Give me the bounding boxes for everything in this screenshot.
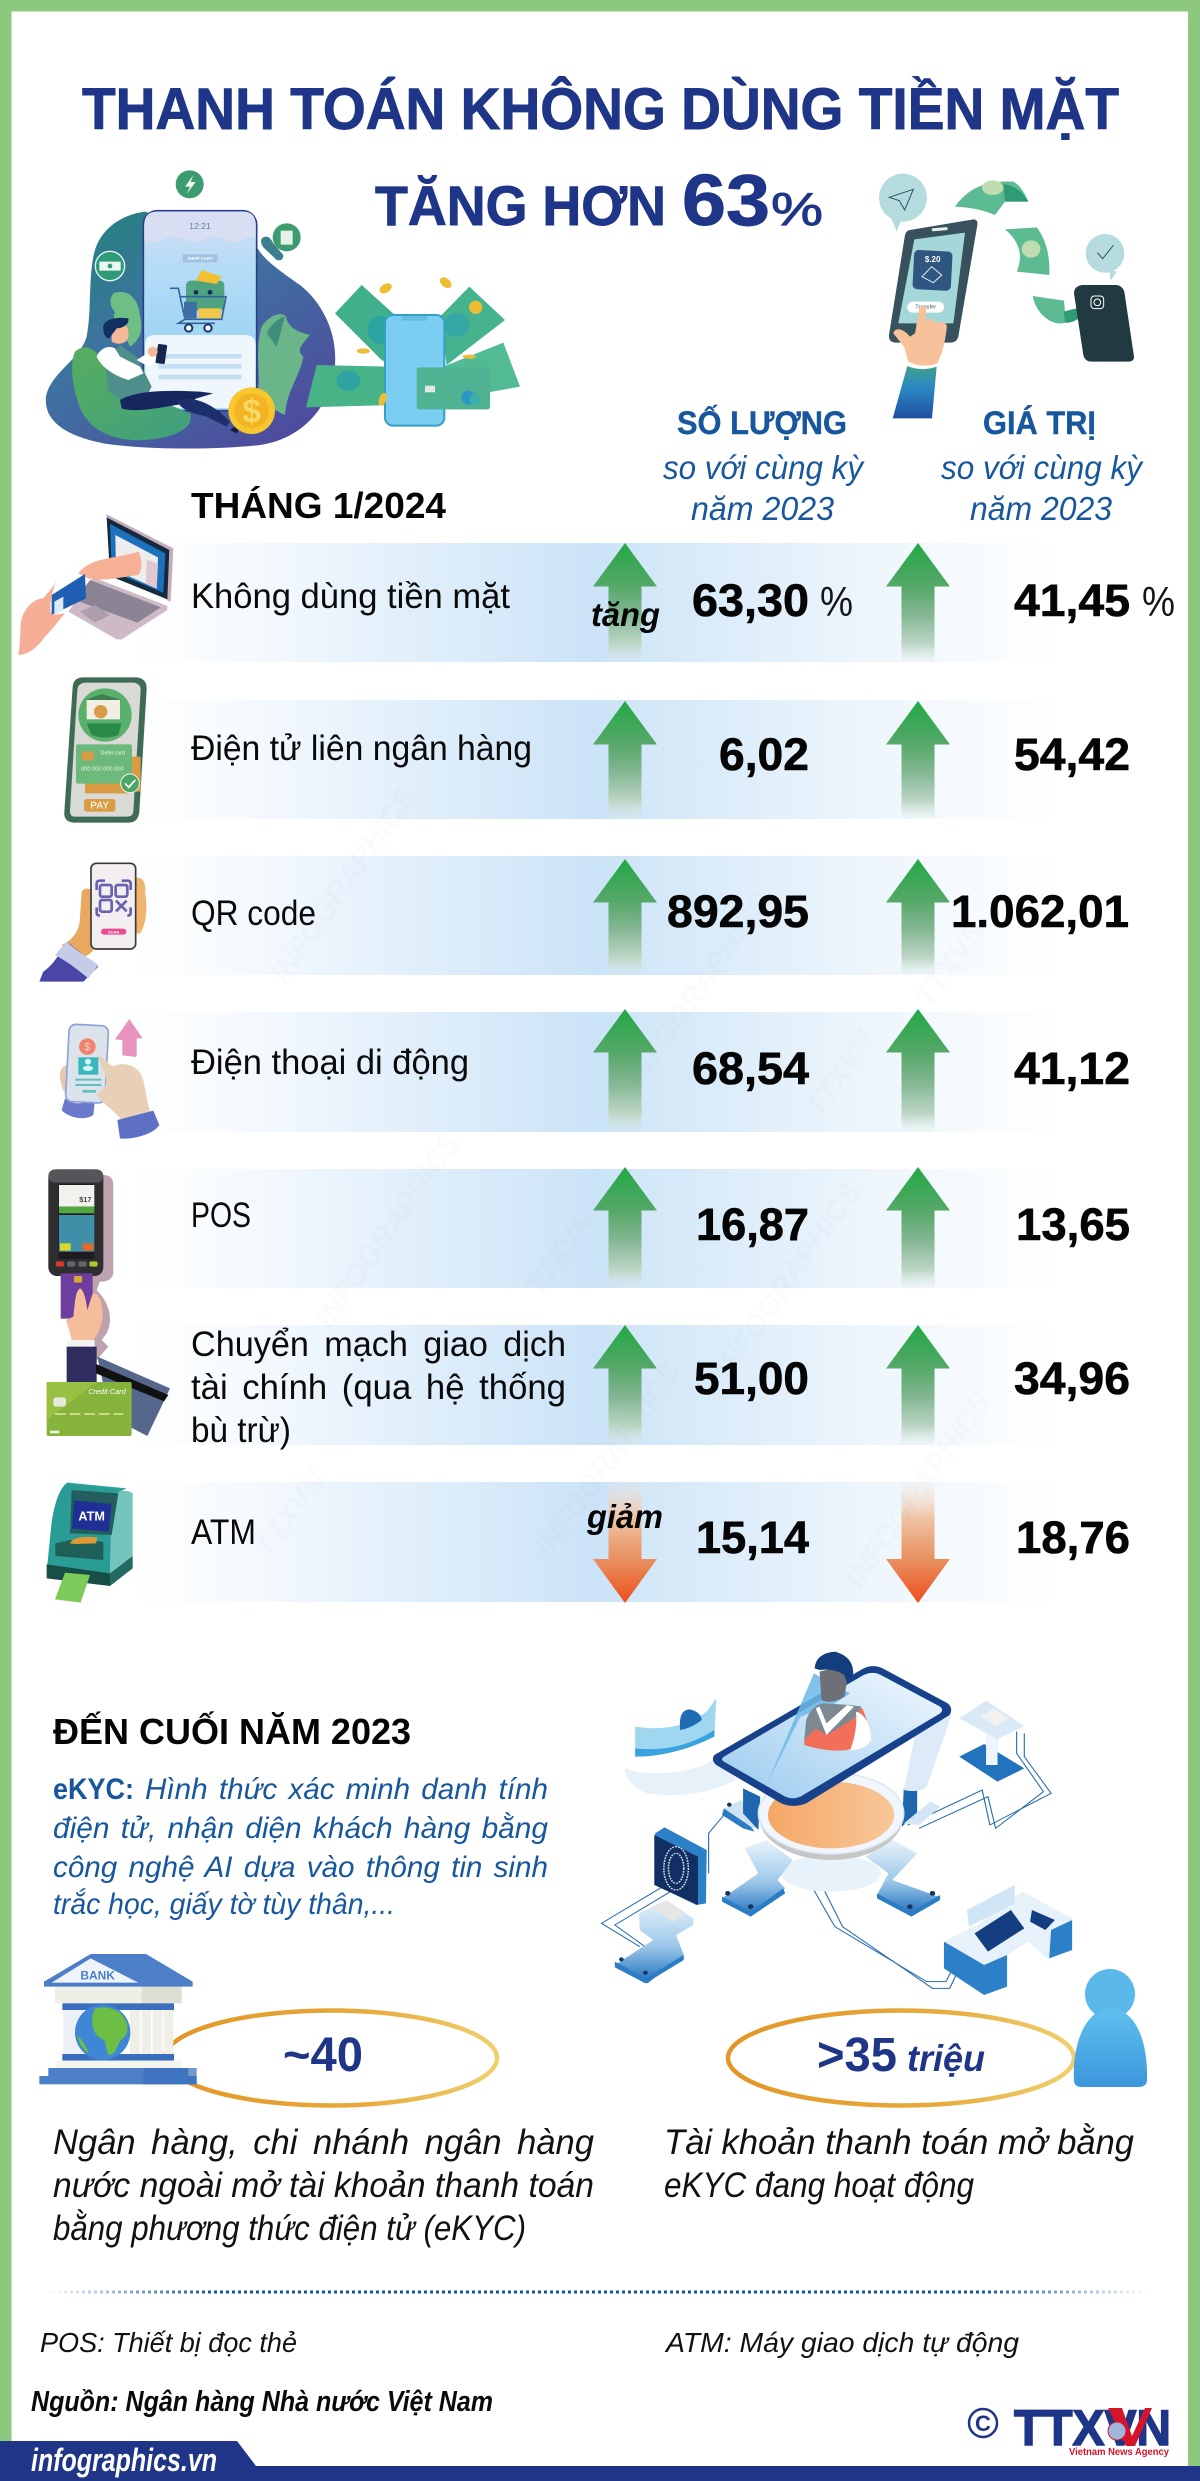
text: TTXVN bbox=[519, 1203, 603, 1304]
row: điện tử liên ngân hàng: Điện tử liên ngân hàng bbox=[191, 729, 532, 768]
icon: phone banking bbox=[64, 677, 147, 823]
row: điện thoại di động: Điện thoại di động bbox=[191, 1043, 469, 1082]
phone with shopping cart: SHOP CART bbox=[187, 256, 213, 261]
ellipse: 40 callout: ~40 bbox=[283, 2029, 363, 2082]
ekyc definition: công nghệ AI dựa vào thông tin sinh bbox=[53, 1851, 548, 1884]
speech bubble with paper plane bbox=[879, 174, 927, 232]
glow behind arc bbox=[624, 1753, 735, 1795]
section heading: đến cuối năm 2023: ĐẾN CUỐI NĂM 2023 bbox=[53, 1710, 411, 1752]
round app icons bbox=[95, 170, 301, 281]
row: qr code: 1.062,01 bbox=[951, 886, 1129, 937]
title: 63 bbox=[682, 161, 770, 241]
row: điện thoại di động: 68,54 bbox=[692, 1043, 809, 1094]
text: TTXVN bbox=[799, 1023, 883, 1124]
text: TTXVN bbox=[909, 913, 993, 1014]
description: accounts: eKYC đang hoạt động bbox=[664, 2166, 974, 2205]
description: banks: bằng phương thức điện tử (eKYC) bbox=[53, 2209, 526, 2248]
description: accounts: Tài khoản thanh toán mở bằng bbox=[664, 2123, 1135, 2162]
row: không dùng tiền mặt bbox=[130, 543, 1175, 662]
icon: bank with globe bbox=[39, 1954, 197, 2084]
row: điện tử liên ngân hàng: 6,02 bbox=[719, 729, 809, 780]
platform bbox=[722, 1773, 940, 1917]
bank notes in flight bbox=[955, 180, 1091, 324]
row: chuyển mạch: Chuyển mạch giao dịch bbox=[191, 1325, 566, 1364]
note: atm: ATM: Máy giao dịch tự động bbox=[664, 2327, 1019, 2358]
hand and sleeve bbox=[893, 306, 947, 418]
person on beanbag bbox=[72, 318, 245, 440]
row: chuyển mạch: bù trừ) bbox=[191, 1411, 291, 1450]
row: không dùng tiền mặt: 41,45 bbox=[1014, 575, 1130, 626]
circuit lines bbox=[601, 1732, 1051, 1988]
sending phone: Transfer bbox=[915, 305, 936, 311]
icon: hand tapping phone bbox=[60, 1019, 159, 1139]
row: không dùng tiền mặt: 63,30 bbox=[692, 575, 809, 626]
row: qr code bbox=[130, 856, 1129, 975]
icon: laptop and card bbox=[18, 514, 173, 655]
ekyc definition: eKYC: bbox=[53, 1773, 134, 1806]
row: điện thoại di động bbox=[130, 1009, 1130, 1132]
blob background bbox=[46, 212, 335, 449]
ekyc definition: điện tử, nhận diện khách hàng bằng bbox=[53, 1812, 548, 1845]
row: pos bbox=[130, 1167, 1130, 1288]
ellipse: 35 triệu callout: >35 bbox=[817, 2029, 897, 2082]
row: pos: 16,87 bbox=[696, 1199, 809, 1250]
source: Nguồn: Ngân hàng Nhà nước Việt Nam bbox=[31, 2386, 493, 2418]
column heading: giá trị: GIÁ TRỊ bbox=[983, 405, 1096, 441]
logo: ttxvn: Vietnam News Agency bbox=[1069, 2447, 1169, 2458]
title: % bbox=[771, 183, 823, 235]
phone with shopping cart bbox=[143, 211, 257, 411]
icon: pos terminal with hand: $17 bbox=[79, 1195, 91, 1204]
icon: atm machine: ATM bbox=[78, 1510, 105, 1524]
text: INFOGRAPHICS bbox=[709, 1177, 868, 1384]
icon: phone banking: Debit card bbox=[101, 750, 125, 756]
logo: ttxvn: C bbox=[975, 2411, 991, 2436]
ekyc definition: Hình thức xác minh danh tính bbox=[145, 1773, 548, 1806]
column heading: số lượng: SỐ LƯỢNG bbox=[677, 405, 847, 441]
icon: credit cards bbox=[47, 1357, 170, 1436]
title: THANH TOÁN KHÔNG DÙNG TIỀN MẶT bbox=[82, 77, 1119, 142]
icon: bank with globe: BANK bbox=[80, 1968, 115, 1982]
text: TTXVN bbox=[249, 1463, 333, 1564]
receiving phone and bubble bbox=[1074, 234, 1134, 362]
illustration: phone money transfer bbox=[879, 174, 1134, 418]
icon: phone banking: PAY bbox=[90, 801, 109, 812]
ellipse: 35 triệu callout: triệu bbox=[907, 2038, 985, 2079]
text: INFOGRAPHICS bbox=[264, 782, 423, 989]
column heading: số lượng: so với cùng kỳ bbox=[663, 449, 865, 486]
row: chuyển mạch bbox=[130, 1325, 1130, 1450]
section heading: tháng 1/2024: THÁNG 1/2024 bbox=[191, 485, 446, 526]
row: chuyển mạch: 51,00 bbox=[694, 1353, 809, 1404]
illustration: person shopping on phone with money bbox=[46, 170, 520, 449]
icon: credit cards: Credit Card bbox=[88, 1387, 127, 1396]
row: atm: 18,76 bbox=[1016, 1512, 1130, 1563]
logo: ttxvn: TTXVN bbox=[1014, 2400, 1171, 2456]
ellipse: 40 callout bbox=[165, 2010, 497, 2106]
row: atm: 15,14 bbox=[696, 1512, 809, 1563]
row: không dùng tiền mặt: % bbox=[1142, 578, 1175, 625]
row: qr code: QR code bbox=[191, 894, 316, 933]
row: không dùng tiền mặt: tăng bbox=[591, 596, 660, 633]
icon: atm machine bbox=[47, 1483, 133, 1603]
scanner bottom left bbox=[615, 1900, 693, 1983]
icon: person bbox=[1074, 1969, 1147, 2087]
icon: hand with qr phone: SCAN bbox=[108, 929, 119, 934]
row: atm: giảm bbox=[586, 1498, 663, 1535]
row: pos: 13,65 bbox=[1016, 1199, 1130, 1250]
row: qr code: 892,95 bbox=[667, 886, 809, 937]
illustration: ekyc platform bbox=[601, 1652, 1072, 1995]
note: pos: POS: Thiết bị đọc thẻ bbox=[40, 2327, 297, 2358]
title bbox=[82, 77, 1119, 241]
column heading: số lượng: năm 2023 bbox=[691, 490, 835, 527]
sending phone bbox=[889, 219, 977, 343]
text: INFOGRAPHICS bbox=[529, 1357, 688, 1564]
text: INFOGRAPHICS bbox=[839, 1387, 998, 1594]
icon: hand tapping phone: $ bbox=[84, 1042, 90, 1054]
text: INFOGRAPHICS bbox=[619, 887, 778, 1094]
column heading: số lượng bbox=[663, 405, 865, 527]
reception desk bbox=[944, 1885, 1072, 1995]
phone with shopping cart: 12:21 bbox=[189, 221, 211, 231]
fingerprint panel bbox=[654, 1827, 707, 1905]
tablet with face bbox=[713, 1652, 952, 1806]
row: điện tử liên ngân hàng bbox=[130, 700, 1130, 819]
icon: phone banking: 000 000 000 000 bbox=[81, 766, 124, 772]
face scan arc bbox=[635, 1698, 716, 1757]
row: chuyển mạch: 34,96 bbox=[1014, 1353, 1130, 1404]
icon: pos terminal with hand bbox=[48, 1169, 113, 1383]
row: điện thoại di động: 41,12 bbox=[1014, 1043, 1130, 1094]
ekyc definition: trắc học, giấy tờ tùy thân,... bbox=[53, 1888, 395, 1921]
icon: hand with qr phone bbox=[39, 863, 146, 982]
column heading: giá trị: so với cùng kỳ bbox=[941, 449, 1144, 486]
description: banks bbox=[53, 2123, 595, 2248]
description: banks: Ngân hàng, chi nhánh ngân hàng bbox=[53, 2123, 595, 2162]
row: chuyển mạch: tài chính (qua hệ thống bbox=[191, 1368, 566, 1407]
flying banknotes bbox=[306, 275, 520, 426]
title: TĂNG HƠN bbox=[375, 174, 666, 237]
gold coin: $ bbox=[242, 394, 261, 431]
row: atm: ATM bbox=[191, 1513, 256, 1552]
footer bar bbox=[0, 2441, 1200, 2481]
kiosk top right bbox=[959, 1701, 1024, 1782]
footer bar: infographics.vn bbox=[31, 2442, 217, 2478]
column heading: giá trị bbox=[941, 405, 1144, 527]
ekyc definition bbox=[53, 1773, 548, 1921]
row: atm bbox=[130, 1482, 1130, 1603]
column heading: giá trị: năm 2023 bbox=[970, 490, 1113, 527]
row: điện tử liên ngân hàng: 54,42 bbox=[1014, 729, 1130, 780]
gold coin bbox=[228, 387, 275, 434]
row: không dùng tiền mặt: Không dùng tiền mặt bbox=[191, 577, 510, 616]
text: INFOGRAPHICS bbox=[309, 1127, 468, 1334]
leaves bbox=[111, 292, 310, 415]
description: banks: nước ngoài mở tài khoản thanh toán bbox=[53, 2166, 594, 2205]
sending phone: $.20 bbox=[925, 255, 941, 264]
row: pos: POS bbox=[191, 1196, 251, 1235]
description: accounts bbox=[664, 2123, 1135, 2205]
row: không dùng tiền mặt: % bbox=[820, 578, 853, 625]
ellipse: 35 triệu callout bbox=[728, 2010, 1074, 2106]
